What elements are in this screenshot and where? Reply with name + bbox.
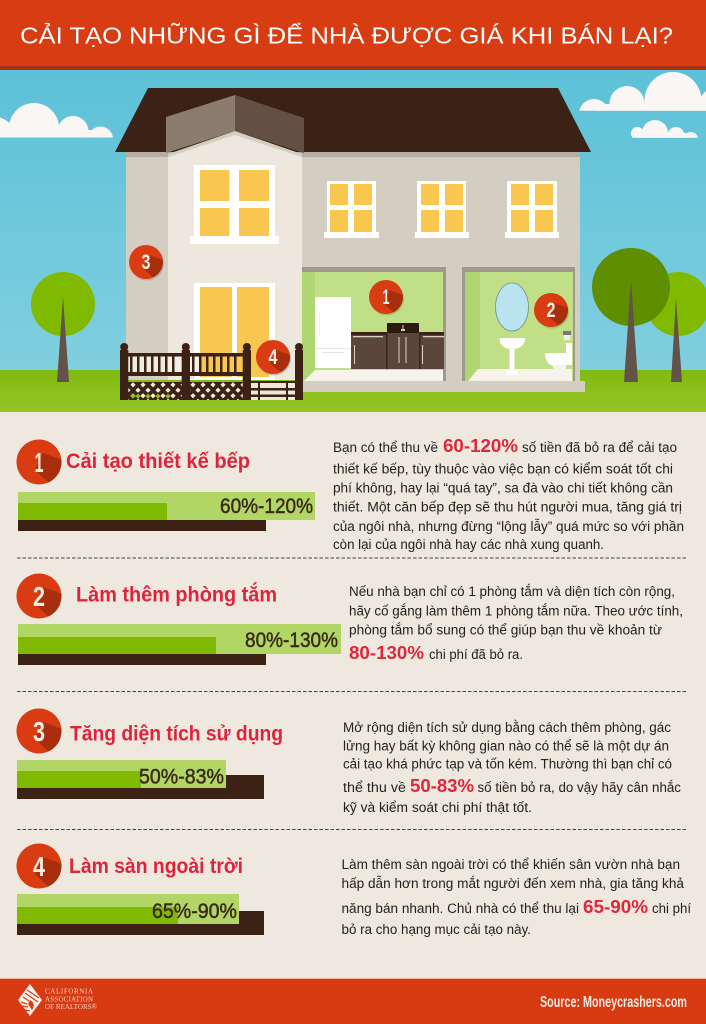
text block: phòng tắm bổ sung có thể giúp bạn thu về khoản từ (349, 622, 662, 637)
title banner (0, 0, 706, 70)
heading: Tăng diện tích sử dụng (70, 722, 283, 746)
text block: số tiền đã bỏ ra để cải tạo (522, 440, 677, 455)
text block: 60-120% (443, 436, 518, 456)
text block: năng bán nhanh. Chủ nhà có thể thu lại (342, 901, 579, 916)
bar chart (18, 492, 315, 531)
marker 2 (534, 293, 571, 330)
association name (45, 988, 98, 1011)
balusters (130, 355, 236, 373)
mirror (496, 283, 528, 331)
roof (115, 88, 591, 152)
panel: section 4 deck (16, 844, 691, 937)
tree: left (31, 272, 95, 382)
bar chart: 50%-83% (139, 764, 224, 788)
text block: Nếu nhà bạn chỉ có 1 phòng tắm và diện tích còn rộng, (349, 584, 675, 599)
association name: CALIFORNIA (45, 988, 93, 996)
association name: OF REALTORS® (45, 1003, 98, 1011)
sky (0, 70, 706, 370)
scene: house illustration (0, 70, 706, 412)
text block: thiết. Một căn bếp đẹp sẽ thu hút người mua, tăng giá trị (333, 500, 682, 514)
panel: section 3 floor area (16, 708, 681, 815)
bar chart: 80%-130% (245, 628, 338, 652)
kitchen room (302, 267, 446, 381)
title: CẢI TẠO NHỮNG GÌ ĐỂ NHÀ ĐƯỢC GIÁ KHI BÁN LẠI? (20, 20, 673, 48)
text block: Làm thêm sàn ngoài trời có thể khiến sân vườn nhà bạn (342, 857, 680, 872)
toilet (545, 331, 572, 376)
ground (0, 370, 706, 412)
bathroom room (462, 267, 575, 381)
marker 4 (256, 340, 293, 377)
text block (343, 720, 681, 815)
tree: right large (592, 248, 670, 382)
bar chart (17, 894, 264, 935)
door: tower (194, 283, 275, 380)
text block: thiết kế bếp, tùy thuộc vào việc bạn có kiểm soát tốt chi (333, 462, 673, 476)
association name: ASSOCIATION (45, 995, 93, 1003)
text block: thể thu về (343, 780, 406, 795)
badge 2 (16, 574, 62, 618)
fence posts (120, 343, 303, 400)
marker 1: 1 (382, 286, 390, 309)
badge 3 (16, 708, 62, 754)
kitchen cabinets (351, 323, 444, 369)
text block: hấp dẫn hơn trong mắt người đến xem nhà, gia tăng khả (342, 876, 684, 891)
panel: section 2 bathroom (16, 574, 683, 665)
heading: Cải tạo thiết kế bếp (66, 449, 250, 473)
marker 3 (129, 245, 166, 282)
fridge (315, 297, 351, 368)
badge 4: 4 (33, 851, 45, 882)
marker 3: 3 (142, 251, 150, 274)
house base slab (303, 381, 585, 392)
step panel (251, 381, 295, 400)
text block: lửng hay bất kỳ không gian nào có thể sẽ là một dự án (343, 738, 669, 754)
window: second floor 2 (415, 181, 469, 238)
marker 1 (369, 280, 406, 317)
dormer gable (166, 95, 304, 153)
text block: chi phí (652, 901, 691, 916)
text block: phí không, hay lại “quá tay”, sa đà vào chi tiết không cần (333, 480, 673, 496)
text block: hãy cố gắng làm thêm 1 phòng tắm nữa. Theo ước tính, (349, 603, 683, 618)
text block: Bạn có thể thu về (333, 440, 438, 455)
badge 1 (16, 440, 62, 484)
text block (342, 857, 691, 937)
cloud: top right (579, 72, 706, 111)
text block: chi phí đã bỏ ra. (429, 647, 523, 662)
footer (0, 978, 706, 1024)
heading: Làm thêm phòng tắm (76, 582, 277, 606)
text block: số tiền bỏ ra, do vậy hãy cân nhắc (478, 780, 681, 795)
sink (500, 338, 525, 375)
heading: Làm sàn ngoài trời (69, 854, 243, 878)
text block (349, 584, 683, 663)
cloud: small right (631, 120, 698, 138)
text block: Mở rộng diện tích sử dụng bằng cách thêm phòng, gác (343, 720, 671, 735)
window: second floor 3 (505, 181, 559, 238)
marker 4: 4 (268, 346, 278, 369)
bar chart (17, 760, 264, 799)
badge 4 (16, 844, 62, 888)
bar chart (18, 624, 341, 665)
window: second floor 1 (324, 181, 379, 238)
text block: cải tạo khá phức tạp và tốn kém. Thường thì bạn chỉ có (343, 756, 672, 772)
bar chart: 60%-120% (220, 494, 313, 518)
panel: section 1 kitchen (16, 436, 684, 552)
lattice (128, 382, 243, 400)
text block: 80-130% (349, 643, 424, 663)
badge 3: 3 (33, 716, 45, 747)
front tower wall (168, 131, 302, 380)
cloud: left (0, 103, 113, 138)
text block: 65-90% (583, 897, 648, 917)
text block: còn lại của ngôi nhà hay các nhà xung quanh. (333, 537, 604, 552)
bar chart: 65%-90% (152, 899, 237, 923)
text block: bỏ ra cho hạng mục cải tạo này. (342, 922, 531, 937)
tree: right small (646, 272, 706, 382)
text block: kỹ và kiểm soát chi phí thật tốt. (343, 800, 532, 815)
badge 2: 2 (33, 581, 45, 612)
text block: 50-83% (410, 776, 474, 796)
text block: của ngôi nhà, nhưng đừng “lộng lẫy” quá mức so với phần (333, 519, 684, 534)
window: tower upper (190, 165, 279, 244)
fence (120, 343, 303, 400)
text block (333, 436, 684, 552)
badge 1: 1 (34, 447, 44, 478)
lattice green gaps (130, 394, 171, 399)
house walls (126, 152, 580, 381)
marker 2: 2 (546, 299, 556, 322)
icon: association logo (18, 984, 42, 1016)
